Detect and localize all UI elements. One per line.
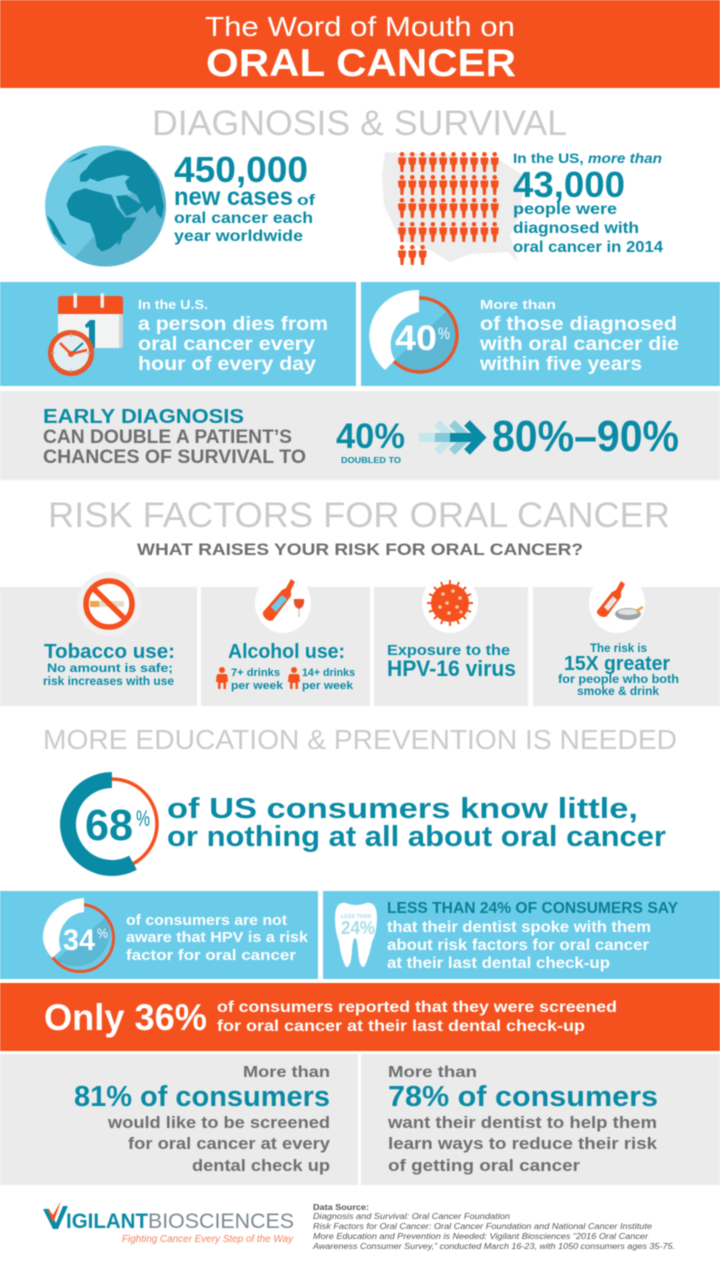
text: data source: Risk Factors for Oral Cancer: Oral Cancer Foundation and National Cancer Institute — [313, 1221, 652, 1231]
text: screened at last check-up — [217, 999, 617, 1035]
text: 15X greater: 15X greater — [564, 653, 670, 675]
heading: diagnosis and survival: DIAGNOSIS & SURVIVAL — [152, 104, 567, 143]
logo: Vigilant Biosciences: Fighting Cancer Every Step of the Way — [122, 1234, 294, 1245]
text: die within five years — [479, 297, 679, 375]
stat: 40 percent doubled: 40% — [336, 417, 405, 456]
text: person dies every hour: oral cancer every — [138, 334, 315, 355]
text: tobacco use: No amount is safe; — [47, 661, 173, 675]
panel: HPV-16 exposure — [374, 573, 528, 706]
icon: tooth: LESS THAN — [341, 914, 371, 920]
stat: 450,000 new cases: oral cancer each — [174, 210, 313, 227]
logo: Vigilant Biosciences: BIOSCIENCES — [148, 1210, 294, 1233]
panel: 40 percent die within five years — [361, 282, 720, 386]
stat: 450,000 new cases: of — [297, 192, 316, 209]
stat: 43,000 diagnosed: people were — [513, 201, 617, 218]
text: 15X greater: The risk is — [590, 643, 647, 655]
text: alcohol use: Alcohol use: — [228, 641, 345, 663]
text: dentist spoke: LESS THAN 24% OF CONSUMERS SAY — [387, 900, 678, 917]
text: die within five years: More than — [480, 297, 556, 312]
text: dentist spoke: at their last dental check-up — [387, 955, 610, 972]
stat: 450,000 new cases: new cases — [174, 183, 293, 211]
text: 15X greater: for people who both — [558, 674, 679, 686]
panel: tobacco use — [0, 572, 197, 706]
panel: 78 percent want dentist help — [361, 1054, 720, 1185]
panel: 81 percent want screening: 81% of consumers — [74, 1081, 330, 1113]
stat: only 36 percent: Only 36% — [44, 997, 207, 1038]
chart: 40 percent donut: % — [438, 324, 450, 343]
icon: woman figure — [216, 667, 228, 689]
text: tobacco use — [43, 641, 175, 688]
panel: 34 percent HPV awareness — [0, 891, 318, 979]
stat: 40 percent doubled: DOUBLED TO — [341, 455, 401, 465]
text: dentist spoke — [387, 900, 678, 972]
chart: 34 percent donut — [43, 898, 114, 972]
heading: risk factors: RISK FACTORS FOR ORAL CANCER — [48, 496, 670, 535]
header banner — [0, 0, 720, 88]
text: person dies every hour: hour of every day — [138, 354, 316, 375]
arrow — [419, 423, 481, 452]
text: data source: Diagnosis and Survival: Oral Cancer Foundation — [313, 1211, 510, 1221]
text: 68 percent know little: of US consumers know little, — [167, 793, 638, 825]
stat: 43,000 diagnosed: In the US, more than — [513, 150, 662, 166]
chart: 34 percent donut: 34 — [63, 924, 95, 957]
text: person dies every hour: In the U.S. — [138, 297, 208, 312]
chart: 68 percent donut: 68 — [85, 801, 133, 850]
icon: calendar and clock — [50, 293, 123, 374]
text: 14+ drinks — [302, 667, 355, 692]
text: HPV awareness: of consumers are not — [126, 912, 287, 929]
panel: only 36 percent screened — [0, 983, 720, 1051]
panel: 81 percent want screening — [0, 1054, 358, 1185]
panel: 78 percent want dentist help: 78% of consumers — [388, 1081, 658, 1113]
text: die within five years: with oral cancer die — [479, 334, 679, 355]
text: 68 percent know little — [167, 793, 666, 853]
text: dentist spoke: about risk factors for oral cancer — [387, 937, 649, 954]
title: ORAL CANCER — [206, 42, 516, 85]
text: tobacco use: Tobacco use: — [44, 641, 175, 663]
chart: 40 percent donut — [369, 290, 457, 374]
text: tobacco use: risk increases with use — [43, 674, 174, 688]
text: HPV awareness: aware that HPV is a risk — [126, 929, 309, 946]
text: early diagnosis: CAN DOUBLE A PATIENT’S — [43, 427, 292, 448]
title — [205, 11, 516, 85]
icon: tooth — [335, 903, 377, 967]
text: data source: More Education and Prevention is Needed: Vigilant Biosciences “2016 Oral Cancer — [313, 1231, 649, 1241]
stat: 80 to 90 percent: 80%–90% — [492, 412, 679, 461]
panel: 24 percent dentist spoke — [323, 891, 720, 979]
text: data source — [312, 1202, 675, 1251]
icon: globe — [44, 144, 167, 268]
panel: 81 percent want screening: dental check up — [192, 1156, 330, 1175]
text: die within five years: within five years — [479, 354, 642, 375]
text: early diagnosis: CHANCES OF SURVIVAL TO — [43, 447, 306, 468]
panel: early diagnosis — [0, 391, 720, 480]
text: dentist spoke: that their dentist spoke with them — [387, 919, 651, 936]
panel: 78 percent want dentist help: want their dentist to help them — [387, 1113, 657, 1132]
text: person dies every hour — [138, 297, 328, 375]
chart: 68 percent donut: % — [136, 806, 150, 831]
chart: 68 percent donut — [52, 764, 172, 884]
text: early diagnosis: EARLY DIAGNOSIS — [43, 406, 244, 428]
heading: more education and prevention: MORE EDUCATION & PREVENTION IS NEEDED — [43, 724, 677, 755]
text: alcohol use — [216, 641, 355, 692]
text: person dies every hour: a person dies from — [138, 314, 328, 335]
text: 7+ drinks: 7+ drinks — [231, 667, 280, 679]
people pictogram — [398, 152, 499, 265]
panel: 81 percent want screening: would like to be screened — [107, 1113, 330, 1132]
logo: Vigilant Biosciences — [43, 1201, 294, 1245]
text: 15X greater — [558, 643, 679, 698]
panel: 81 percent want screening: More than — [243, 1064, 330, 1081]
text: HPV-16: HPV-16 virus — [387, 656, 516, 681]
icon: man figure — [288, 667, 300, 689]
panel: 78 percent want dentist help: More than — [388, 1064, 477, 1081]
subheading: what raises your risk: WHAT RAISES YOUR RISK FOR ORAL CANCER? — [137, 540, 583, 559]
text: 14+ drinks: per week — [302, 680, 354, 692]
text: 14+ drinks: 14+ drinks — [302, 667, 355, 679]
stat: 43,000 diagnosed: oral cancer in 2014 — [513, 239, 663, 256]
stat: 450,000 new cases: 450,000 — [174, 149, 308, 190]
text: 7+ drinks — [231, 667, 284, 692]
stat: 43,000 diagnosed — [513, 150, 663, 256]
text: screened at last check-up: for oral cancer at their last dental check-up — [217, 1018, 585, 1035]
panel: 81 percent want screening: for oral cancer at every — [128, 1134, 331, 1153]
text: die within five years: of those diagnosed — [480, 314, 677, 335]
panel: death every hour — [0, 282, 356, 386]
text: 68 percent know little: or nothing at all about oral cancer — [167, 821, 666, 853]
panel: 15X greater risk — [533, 573, 720, 706]
text: 7+ drinks: per week — [231, 680, 284, 692]
icon: no smoking — [77, 572, 141, 636]
icon: tooth: 24% — [341, 918, 375, 938]
text: early diagnosis — [43, 406, 306, 468]
text: screened at last check-up: of consumers reported that they were screened — [217, 999, 617, 1016]
icon: virus — [422, 573, 478, 633]
stat: 43,000 diagnosed: 43,000 — [513, 164, 625, 205]
text: data source: Awareness Consumer Survey,” conducted March 16-23, with 1050 consumers ages 35-75. — [312, 1241, 675, 1251]
logo: Vigilant Biosciences: IGILANT — [66, 1210, 148, 1233]
text: HPV awareness — [126, 912, 309, 964]
stat: 450,000 new cases: year worldwide — [174, 228, 303, 245]
map of US with people icons — [382, 152, 524, 265]
text: HPV-16: Exposure to the — [387, 642, 510, 659]
stat: 450,000 new cases — [174, 149, 316, 245]
text: HPV awareness: factor for oral cancer — [126, 947, 296, 964]
panel: 78 percent want dentist help: learn ways to reduce their risk — [388, 1134, 658, 1153]
chart: 34 percent donut: % — [97, 925, 108, 941]
stat: 43,000 diagnosed: diagnosed with — [513, 220, 639, 237]
icon: bottle and ashtray — [589, 573, 645, 633]
chart: 40 percent donut: 40 — [395, 319, 437, 358]
panel: 78 percent want dentist help: of getting oral cancer — [388, 1156, 580, 1175]
icon: wine bottle and glass — [255, 573, 311, 633]
title: The Word of Mouth on — [205, 11, 515, 42]
US map — [382, 152, 524, 262]
panel: alcohol use — [201, 573, 370, 706]
text: 15X greater: smoke & drink — [577, 686, 660, 698]
text: data source: Data Source: — [313, 1202, 369, 1212]
text: HPV-16 — [387, 642, 516, 681]
